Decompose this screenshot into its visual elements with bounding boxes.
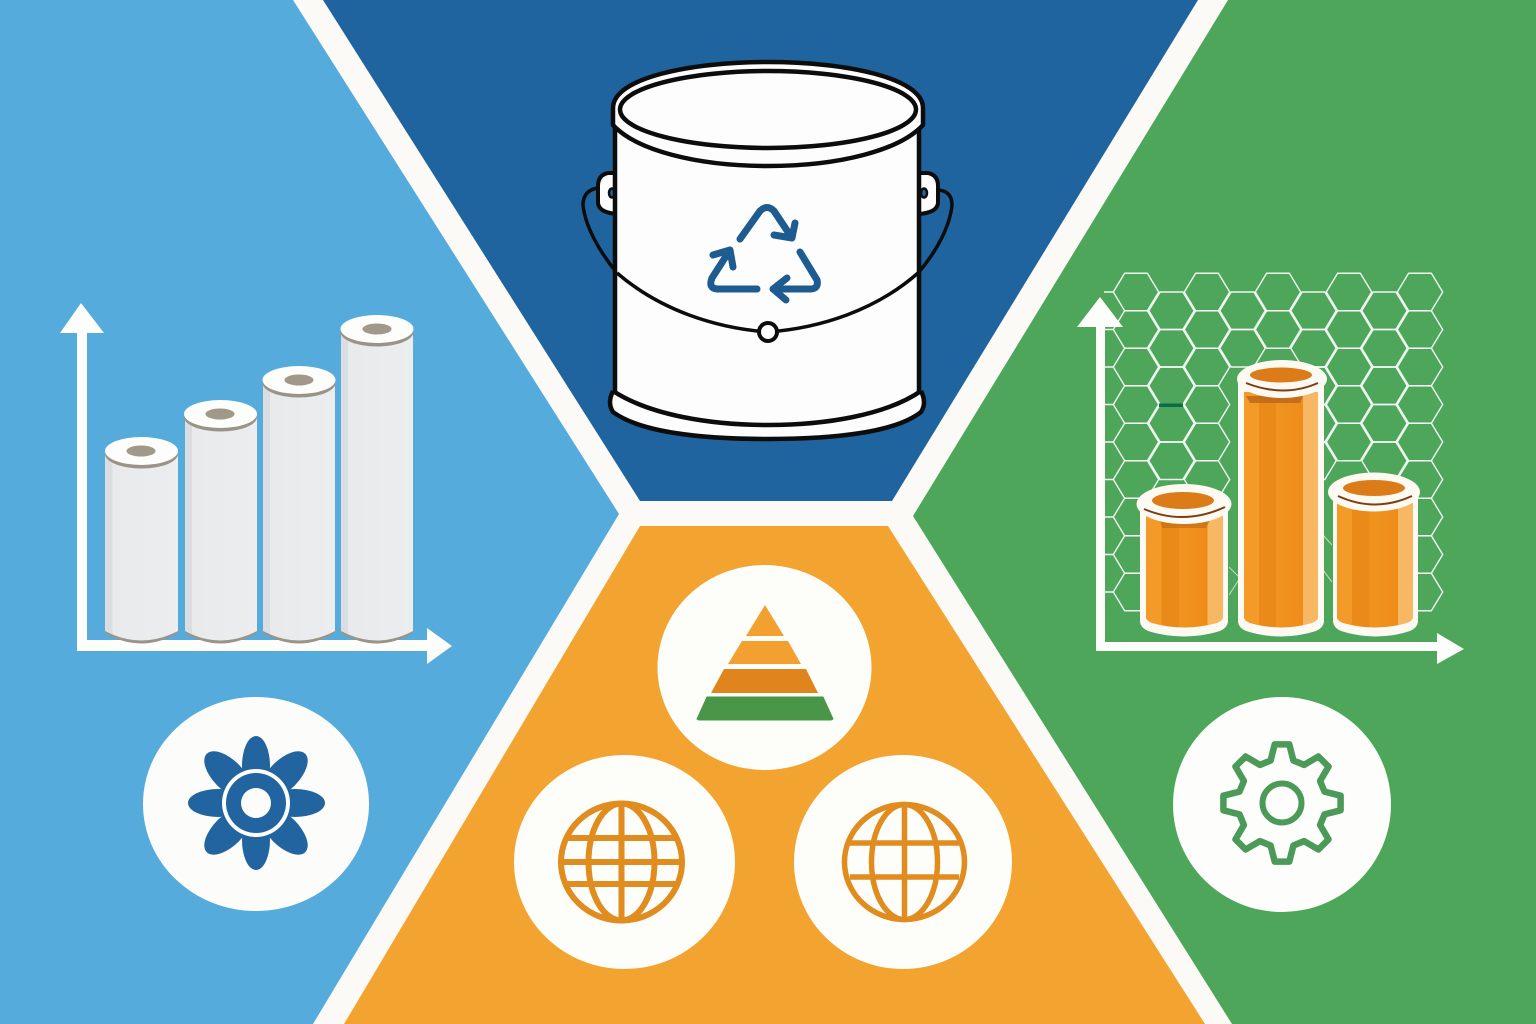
- handle pivot: [759, 323, 777, 341]
- icon: paint bucket with recycling symbol: [583, 62, 952, 439]
- bar chart: paper rolls: [60, 303, 452, 664]
- bucket opening: [620, 71, 916, 148]
- panel: right green: [913, 0, 1536, 1024]
- icon: green gear: [1173, 697, 1391, 912]
- paper roll 1: [105, 437, 178, 644]
- orange cylinder 1: [1136, 484, 1232, 636]
- paper roll 3: [262, 366, 336, 644]
- orange cylinder 3: [1328, 472, 1420, 636]
- icon: blue flower: [143, 697, 369, 911]
- icon: pyramid: [658, 565, 872, 770]
- bucket ears: [598, 173, 938, 214]
- bar chart: orange cylinders on hexagon grid: [1077, 273, 1464, 664]
- paper roll 4: [340, 315, 414, 644]
- panel: top dark blue: [323, 0, 1198, 501]
- chart axes: [60, 303, 452, 664]
- icon: recycling arrows: [711, 208, 817, 300]
- panel: left blue: [0, 0, 619, 1024]
- dark green dash: [1159, 404, 1183, 407]
- panel: bottom orange: [344, 526, 1205, 1024]
- bucket body: [615, 118, 919, 398]
- hexagon mesh background: [1104, 273, 1443, 611]
- top rim: [613, 62, 923, 166]
- chart axes: [1077, 297, 1464, 664]
- icon: globe left: [514, 755, 735, 969]
- paper roll 2: [184, 400, 257, 644]
- front handle: [617, 273, 918, 332]
- bottom rim: [610, 391, 924, 439]
- handle back parts: [583, 188, 952, 273]
- orange cylinder 2: [1237, 360, 1327, 636]
- icon: globe right: [794, 755, 1012, 969]
